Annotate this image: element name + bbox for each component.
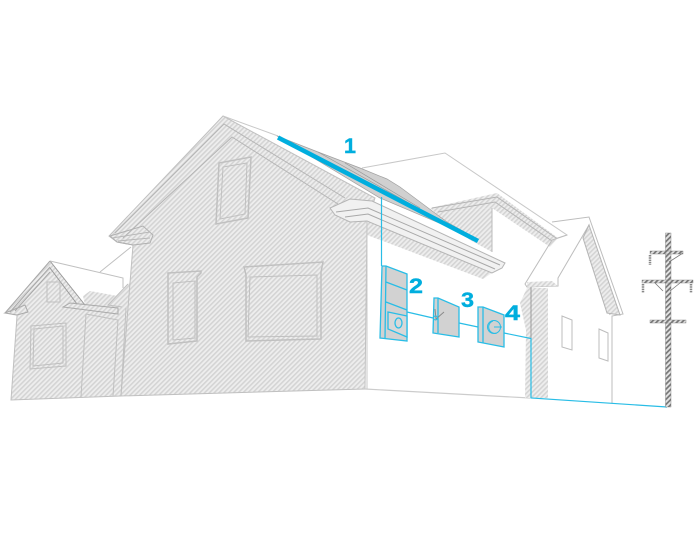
number 1: 1 bbox=[344, 135, 356, 158]
right house bbox=[520, 217, 623, 403]
main gable wall bbox=[109, 116, 375, 396]
large window bbox=[244, 262, 323, 341]
main eave bbox=[330, 199, 505, 389]
component 2: solar main panel bbox=[380, 266, 407, 341]
ground line bbox=[365, 389, 530, 398]
number 3: 3 bbox=[461, 289, 474, 312]
number 4: 4 bbox=[505, 302, 520, 325]
lower left window bbox=[168, 271, 201, 344]
utility pole bbox=[642, 233, 693, 407]
small left house bbox=[5, 247, 132, 400]
upper gable window bbox=[216, 157, 251, 224]
number 2: 2 bbox=[409, 275, 423, 298]
solar panel blue edge bbox=[278, 138, 478, 241]
component 3: disconnect bbox=[433, 298, 459, 337]
solar panels on roof bbox=[277, 136, 478, 241]
component 4: utility meter bbox=[478, 307, 504, 347]
conduit wiring bbox=[382, 197, 667, 407]
upper roof and dormer bbox=[223, 116, 567, 252]
